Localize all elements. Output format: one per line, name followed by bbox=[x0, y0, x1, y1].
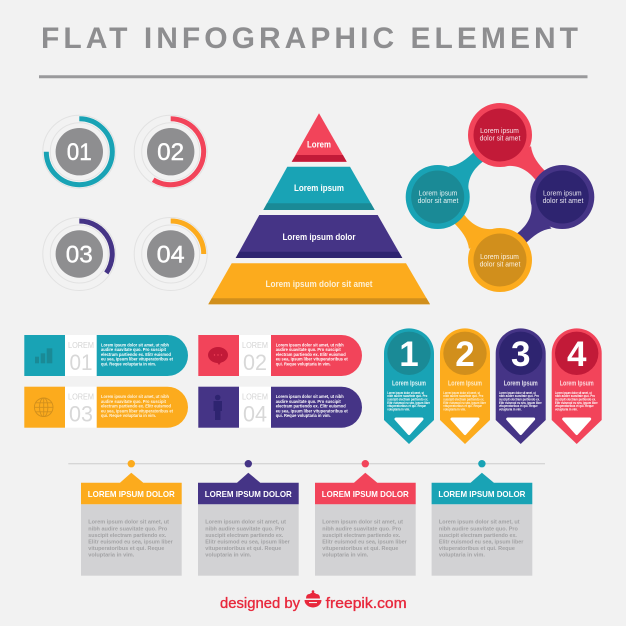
tab 04: Lorem ipsum dolor sit amet, ut nibh bbox=[276, 394, 344, 399]
timeline card 2: Lorem ipsum dolor sit amet, ut bbox=[205, 520, 286, 526]
tab 02: audire suavitate quo. Pro suscipit bbox=[276, 347, 341, 352]
pin 1: Elitr euismod eu sea, ipsum liber bbox=[387, 401, 431, 405]
node: yellow bbox=[468, 228, 532, 292]
node: yellow: Lorem ipsum bbox=[480, 252, 519, 261]
timeline card 1: voluptaria in vim. bbox=[88, 552, 135, 558]
tab 02: LOREM bbox=[242, 341, 268, 350]
tab 04: LOREM bbox=[242, 393, 268, 402]
panel: numbered pins bbox=[384, 328, 602, 444]
pin 3 bbox=[496, 328, 546, 444]
timeline card 4: nibh audire suavitate quo. Pro bbox=[439, 526, 518, 532]
tab 02: eu sea, ipsum liber vituperatoribus et bbox=[276, 357, 348, 362]
progress circle 01 bbox=[43, 115, 116, 188]
progress circle 02: 02 bbox=[157, 139, 184, 166]
node: teal: dolor sit amet bbox=[418, 196, 459, 205]
pyramid tier 3 bbox=[236, 215, 402, 258]
pin 4: suscipit electram partiendo ex. bbox=[555, 398, 596, 402]
timeline card 2: Elitr euismod eu sea, ipsum liber bbox=[205, 539, 291, 545]
tab 01: qui. Reque voluptaria in vim. bbox=[101, 361, 156, 366]
tab 03: 03 bbox=[69, 402, 93, 427]
pyramid tier 3: Lorem ipsum dolor bbox=[282, 232, 356, 242]
timeline card 1: LOREM IPSUM DOLOR bbox=[88, 489, 175, 499]
panel: pyramid bbox=[208, 113, 430, 304]
node: navy: Lorem ipsum bbox=[543, 188, 582, 198]
tab 02: 02 bbox=[243, 350, 267, 375]
tab 04 bbox=[198, 387, 362, 428]
timeline card 2: nibh audire suavitate quo. Pro bbox=[205, 526, 285, 532]
pin 4: Elitr euismod eu sea, ipsum liber bbox=[555, 401, 598, 405]
panel: progress circles bbox=[43, 115, 207, 290]
timeline card 3: voluptaria in vim. bbox=[322, 552, 369, 558]
timeline card 3: nibh audire suavitate quo. Pro bbox=[322, 526, 402, 532]
tab 01 bbox=[24, 335, 188, 376]
icon: bar chart bbox=[35, 348, 52, 363]
icon: speech bubble bbox=[208, 347, 228, 365]
pin 2: Lorem ipsum dolor sit amet, ut bbox=[443, 391, 481, 395]
timeline card 3: suscipit electram partiendo ex. bbox=[322, 533, 401, 539]
timeline card 3: Lorem ipsum dolor sit amet, ut bbox=[322, 520, 403, 526]
pin 2: voluptaria in vim. bbox=[443, 408, 466, 412]
tab 03: audire suavitate quo. Pro suscipit bbox=[101, 399, 166, 404]
footer credit bbox=[220, 590, 407, 612]
pin 3: Lorem Ipsum bbox=[504, 379, 538, 388]
pin 4 bbox=[552, 328, 602, 444]
timeline card 2: LOREM IPSUM DOLOR bbox=[205, 489, 292, 499]
timeline card 4: vituperatoribus et qui. Reque bbox=[439, 546, 515, 552]
pin 3: nibh audire suavitate quo. Pro bbox=[499, 394, 539, 398]
progress circle 02 bbox=[134, 115, 207, 188]
tab 02: electram partiendo ex. Elitr euismod bbox=[276, 352, 346, 357]
pin 1: Lorem ipsum dolor sit amet, ut bbox=[387, 391, 425, 395]
timeline card 3: LOREM IPSUM DOLOR bbox=[322, 489, 409, 499]
timeline card 4: Lorem ipsum dolor sit amet, ut bbox=[439, 520, 520, 526]
pin 2: suscipit electram partiendo ex. bbox=[443, 398, 484, 402]
pin 4: 4 bbox=[567, 335, 587, 374]
pin 3: Lorem ipsum dolor sit amet, ut bbox=[499, 391, 536, 395]
progress circle 01: 01 bbox=[67, 139, 92, 166]
node: red: dolor sit amet bbox=[480, 134, 521, 142]
timeline card 2: suscipit electram partiendo ex. bbox=[205, 533, 284, 539]
pin 4: Lorem ipsum dolor sit amet, ut bbox=[555, 391, 592, 395]
pin 2: Lorem Ipsum bbox=[448, 379, 482, 388]
tab 02: qui. Reque voluptaria in vim. bbox=[276, 361, 331, 366]
tab 03: qui. Reque voluptaria in vim. bbox=[101, 413, 156, 418]
icon: globe bbox=[34, 398, 53, 417]
progress circle 04: 04 bbox=[157, 242, 185, 268]
pin 1: 1 bbox=[399, 335, 419, 374]
tab 03: eu sea, ipsum liber vituperatoribus et bbox=[101, 408, 173, 413]
panel: numbered tabs bbox=[24, 335, 362, 428]
node: teal: Lorem ipsum bbox=[419, 188, 457, 198]
pyramid tier 4 bbox=[208, 263, 430, 304]
pyramid tier 1: Lorem bbox=[307, 140, 331, 150]
progress circle 03 bbox=[43, 218, 116, 290]
tab 03: electram partiendo ex. Elitr euismod bbox=[101, 404, 171, 409]
tab 04: qui. Reque voluptaria in vim. bbox=[276, 413, 331, 418]
node: navy: dolor sit amet bbox=[543, 196, 584, 205]
tab 04: 04 bbox=[243, 402, 267, 427]
timeline card 1: Lorem ipsum dolor sit amet, ut bbox=[88, 520, 169, 526]
timeline card 4: suscipit electram partiendo ex. bbox=[439, 533, 517, 539]
timeline card 4: voluptaria in vim. bbox=[439, 552, 485, 558]
tab 04: eu sea, ipsum liber vituperatoribus et bbox=[276, 408, 348, 413]
pin 1: vituperatoribus et qui. Reque bbox=[387, 404, 426, 408]
timeline card 2: voluptaria in vim. bbox=[205, 552, 252, 558]
tab 04: audire suavitate quo. Pro suscipit bbox=[276, 399, 341, 404]
timeline card 2 bbox=[198, 460, 299, 576]
tab 03: LOREM bbox=[68, 393, 94, 402]
timeline card 4: Elitr euismod eu sea, ipsum liber bbox=[439, 539, 524, 545]
node: red: Lorem ipsum bbox=[480, 126, 519, 135]
title: FLAT INFOGRAPHIC ELEMENT bbox=[41, 22, 578, 55]
timeline card 1: vituperatoribus et qui. Reque bbox=[88, 546, 164, 552]
tab 01: 01 bbox=[70, 350, 92, 375]
tab 03 bbox=[24, 387, 188, 428]
progress circle 03: 03 bbox=[66, 242, 93, 268]
timeline card 1: Elitr euismod eu sea, ipsum liber bbox=[88, 539, 174, 545]
node: yellow: dolor sit amet bbox=[480, 260, 521, 268]
pin 2: vituperatoribus et qui. Reque bbox=[443, 404, 482, 408]
pin 1: suscipit electram partiendo ex. bbox=[387, 398, 428, 402]
tab 04: electram partiendo ex. Elitr euismod bbox=[276, 404, 346, 409]
pin 2 bbox=[440, 328, 490, 444]
pin 2: Elitr euismod eu sea, ipsum liber bbox=[443, 401, 487, 405]
tab 01: eu sea, ipsum liber vituperatoribus et bbox=[101, 357, 173, 362]
pin 3: 3 bbox=[511, 335, 530, 374]
pin 4: vituperatoribus et qui. Reque bbox=[555, 404, 594, 408]
footer credit: freepik.com bbox=[326, 596, 407, 612]
pin 1: voluptaria in vim. bbox=[387, 408, 410, 412]
timeline card 3: vituperatoribus et qui. Reque bbox=[322, 546, 398, 552]
node: teal bbox=[406, 165, 470, 229]
tab 01: electram partiendo ex. Elitr euismod bbox=[101, 352, 171, 357]
pin 2: nibh audire suavitate quo. Pro bbox=[443, 394, 483, 398]
pin 2: 2 bbox=[455, 335, 475, 374]
pin 4: voluptaria in vim. bbox=[555, 408, 578, 412]
tab 01: audire suavitate quo. Pro suscipit bbox=[101, 347, 166, 352]
icon: freepik crown bbox=[304, 590, 322, 608]
pyramid tier 2 bbox=[263, 167, 375, 210]
pin 3: Elitr euismod eu sea, ipsum liber bbox=[499, 401, 542, 405]
pin 1: nibh audire suavitate quo. Pro bbox=[387, 394, 427, 398]
tab 03: Lorem ipsum dolor sit amet, ut nibh bbox=[101, 394, 169, 399]
pin 1: Lorem Ipsum bbox=[392, 379, 426, 388]
pin 1 bbox=[384, 328, 434, 444]
node: red bbox=[468, 103, 532, 167]
timeline card 3 bbox=[315, 460, 416, 576]
timeline card 4 bbox=[432, 460, 532, 576]
panel: circular process bbox=[406, 103, 594, 292]
footer credit: designed by bbox=[220, 596, 301, 612]
icon: person bbox=[214, 395, 222, 420]
timeline card 3: Elitr euismod eu sea, ipsum liber bbox=[322, 539, 408, 545]
pyramid tier 4: Lorem ipsum dolor sit amet bbox=[266, 279, 372, 289]
pyramid tier 1 bbox=[292, 113, 347, 162]
pyramid tier 2: Lorem ipsum bbox=[294, 183, 344, 193]
pin 4: Lorem Ipsum bbox=[560, 379, 594, 388]
progress circle 04 bbox=[134, 218, 207, 290]
tab 02 bbox=[198, 335, 362, 376]
pin 3: vituperatoribus et qui. Reque bbox=[499, 404, 538, 408]
panel: timeline bbox=[68, 460, 545, 576]
node: navy bbox=[530, 165, 594, 229]
tab 02: Lorem ipsum dolor sit amet, ut nibh bbox=[276, 342, 344, 348]
timeline card 1: nibh audire suavitate quo. Pro bbox=[88, 526, 168, 532]
timeline card 4: LOREM IPSUM DOLOR bbox=[438, 489, 525, 499]
pin 3: voluptaria in vim. bbox=[499, 408, 522, 412]
timeline card 1: suscipit electram partiendo ex. bbox=[88, 533, 167, 539]
tab 01: LOREM bbox=[68, 341, 94, 350]
tab 01: Lorem ipsum dolor sit amet, ut nibh bbox=[101, 342, 169, 348]
connector arms bbox=[448, 146, 552, 249]
pin 4: nibh audire suavitate quo. Pro bbox=[555, 394, 595, 398]
timeline card 1 bbox=[81, 460, 182, 576]
pin 3: suscipit electram partiendo ex. bbox=[499, 398, 540, 402]
timeline card 2: vituperatoribus et qui. Reque bbox=[205, 546, 281, 552]
